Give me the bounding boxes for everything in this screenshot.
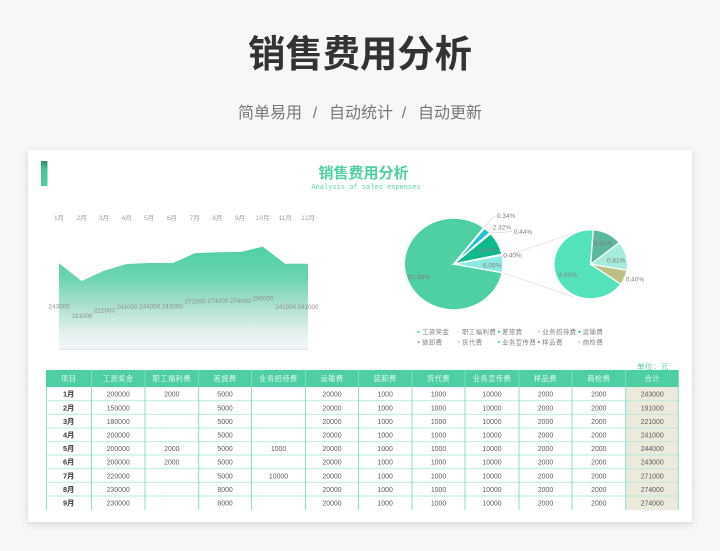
percentage labels: 4.03% (558, 272, 577, 279)
main pie (404, 218, 503, 310)
legend: 业务宣传费 (502, 337, 536, 346)
table row: 2月: 5000 (217, 405, 233, 412)
table header: 业务招待费 (259, 374, 298, 383)
area series (59, 247, 308, 349)
percentage labels: 0.34% (497, 213, 516, 220)
table row: 4月: 200000 (107, 432, 130, 440)
table row: 5月: 1000 (431, 446, 446, 453)
table total column background (626, 387, 679, 510)
subtitle: / (313, 105, 318, 122)
table row: 4月: 1000 (378, 432, 393, 440)
month axis labels: 9月 (235, 214, 245, 222)
table row: 2月: 10000 (482, 405, 502, 412)
data value labels: 271000 (184, 298, 206, 305)
table row: 7月: 1000 (431, 473, 446, 480)
legend: 职工福利费 (462, 327, 496, 336)
percentage labels: 0.40% (503, 252, 522, 260)
table row: 1月: 2000 (164, 392, 180, 399)
table row: 5月: 5000 (217, 446, 233, 453)
table row: 6月: 2000 (591, 460, 607, 467)
table row: 9月: 20000 (322, 500, 342, 508)
table row: 5月: 2000 (164, 446, 180, 453)
month axis labels: 3月 (99, 214, 109, 222)
table header: 工资奖金 (103, 374, 134, 383)
data value labels: 241000 (275, 304, 297, 311)
table row: 7月 (63, 471, 664, 480)
data value labels: 274000 (230, 298, 251, 305)
panel: spreadsheet card (28, 150, 692, 522)
table row: 4月 (63, 430, 664, 440)
table row: 6月: 200000 (107, 460, 130, 467)
table row: 1月: 1000 (431, 392, 446, 399)
table row: 1月: 1月 (63, 390, 74, 399)
table row: 5月: 5月 (63, 444, 74, 453)
card subheading: Analysis of sales expenses (311, 184, 421, 192)
table row: 6月: 1000 (378, 460, 393, 467)
legend: 货代费 (462, 337, 483, 346)
table row: 5月: 10000 (482, 446, 502, 453)
table row: 6月: 1000 (431, 460, 446, 467)
table row: 5月 (63, 444, 664, 453)
month axis labels: 7月 (190, 214, 200, 222)
percentage labels: 0.40% (626, 276, 644, 284)
table row: 6月: 2000 (538, 460, 553, 467)
table header: 商检费 (587, 374, 610, 383)
table row: 9月: 1000 (431, 500, 446, 508)
table row: 6月: 5000 (217, 460, 233, 467)
table row: 2月: 2月 (63, 403, 74, 412)
table row: 9月: 10000 (482, 500, 502, 508)
table row: 1月: 2000 (591, 392, 607, 399)
table row: 4月: 20000 (322, 432, 342, 440)
table row: 1月: 20000 (322, 392, 342, 399)
table header: 职工福利费 (153, 374, 191, 383)
table row: 8月 (63, 485, 664, 494)
legend (417, 327, 603, 346)
subtitle: 自动更新 (418, 104, 482, 122)
table row: 9月: 2000 (538, 500, 553, 508)
table row: 2月: 20000 (322, 405, 342, 412)
month axis labels: 8月 (212, 214, 222, 222)
table row: 4月: 5000 (217, 432, 233, 440)
table header: 合计 (645, 374, 660, 383)
table row: 7月: 220000 (107, 473, 130, 480)
data value labels: 221000 (94, 307, 116, 314)
legend: 业务招待费 (542, 327, 577, 336)
table row: 7月: 1000 (378, 473, 393, 480)
month axis labels: 4月 (122, 214, 132, 222)
subtitle: 自动统计 (329, 104, 393, 122)
table row: 6月: 2000 (164, 460, 180, 467)
table row: 9月: 2000 (591, 500, 607, 508)
table header (46, 370, 679, 387)
table row: 7月: 2000 (538, 473, 553, 480)
month axis labels: 2月 (77, 214, 87, 222)
table row: 4月: 241000 (641, 432, 664, 440)
main title: 销售费用分析 (248, 33, 472, 75)
table row: 9月: 8000 (217, 500, 233, 508)
table row: 9月: 274000 (641, 500, 664, 508)
table row: 4月: 2000 (591, 432, 607, 440)
data value labels: 191000 (71, 313, 93, 320)
table row: 6月 (63, 458, 664, 467)
month axis labels: 1月 (54, 214, 64, 222)
table row: 4月: 2000 (538, 432, 553, 440)
data value labels: 241000 (297, 304, 319, 311)
data table (46, 370, 679, 510)
legend: 差旅费 (502, 327, 523, 336)
table row: 9月: 1000 (378, 500, 393, 508)
table row: 1月: 10000 (482, 392, 502, 399)
table row: 3月: 2000 (538, 419, 553, 426)
subtitle: 简单易用 (238, 104, 302, 122)
data value labels: 274000 (207, 298, 229, 305)
legend: 装卸费 (422, 337, 443, 346)
table row: 3月: 1000 (378, 419, 393, 426)
percentage labels: 0.44% (514, 229, 532, 236)
table row: 3月 (63, 417, 664, 426)
table row: 5月: 244000 (641, 446, 664, 453)
percentage labels: 2.32% (493, 224, 511, 232)
unit label: 单位：元 (637, 361, 669, 371)
month axis labels: 6月 (167, 214, 177, 222)
table header: 货代费 (427, 374, 450, 383)
table row: 5月: 2000 (538, 446, 553, 453)
table row: 1月 (63, 390, 664, 399)
subtitle (238, 104, 482, 122)
month axis labels: 11月 (279, 214, 292, 222)
table row: 8月: 2000 (538, 487, 553, 494)
percentage labels: 6.05% (483, 262, 502, 270)
table row: 2月: 2000 (538, 405, 553, 412)
table row: 7月: 7月 (63, 471, 74, 480)
percentage labels: 0.81% (607, 258, 626, 264)
table row: 1月: 243000 (641, 392, 664, 399)
table row: 8月: 8月 (63, 485, 74, 494)
table header: 业务宣传费 (473, 374, 511, 383)
table row: 5月: 1000 (271, 446, 286, 453)
table row: 4月: 1000 (431, 432, 446, 440)
small slice leader lines (483, 216, 512, 255)
data value labels: 241000 (116, 304, 138, 311)
table row: 3月: 1000 (431, 419, 446, 426)
icon: accent bar (41, 161, 48, 186)
subtitle: / (402, 105, 407, 122)
data value labels (48, 295, 319, 320)
legend: 运输费 (583, 327, 603, 336)
table row: 8月: 20000 (322, 487, 342, 494)
table row: 7月: 5000 (217, 473, 233, 480)
chart: pie of pie (404, 213, 644, 310)
data value labels: 243000 (48, 304, 70, 310)
month axis labels: 5月 (144, 214, 154, 222)
table row: 7月: 10000 (269, 473, 288, 480)
table header: 装卸费 (374, 374, 397, 383)
legend: 工资奖金 (422, 327, 450, 336)
table row: 3月: 2000 (591, 419, 607, 426)
table row: 7月: 2000 (591, 473, 607, 480)
table row: 4月: 10000 (482, 432, 502, 440)
month axis labels (54, 214, 315, 222)
table row: 8月: 2000 (591, 487, 607, 494)
table row: 7月: 271000 (641, 473, 664, 480)
percentage labels: 8.07% (479, 248, 498, 254)
table row: 5月: 20000 (322, 446, 342, 453)
data value labels: 244000 (139, 303, 161, 310)
month axis labels: 10月 (256, 214, 270, 222)
percentage labels: 82.38% (408, 274, 430, 281)
table row: 6月: 243000 (641, 460, 664, 467)
table row: 3月: 20000 (322, 419, 342, 426)
table row: 1月: 1000 (378, 392, 393, 399)
legend: 商检费 (583, 337, 603, 346)
table row: 8月: 10000 (482, 487, 502, 494)
table row: 3月: 10000 (482, 419, 502, 426)
data value labels: 243000 (162, 304, 183, 310)
table row: 9月: 230000 (107, 500, 130, 508)
table header: 项目 (61, 374, 76, 383)
table header: 运输费 (320, 374, 344, 383)
table row: 2月: 150000 (107, 405, 130, 412)
table row: 9月 (63, 498, 664, 508)
table row: 2月 (63, 403, 664, 412)
table row: 1月: 200000 (107, 392, 130, 399)
table row: 2月: 2000 (591, 405, 607, 412)
area chart (48, 214, 319, 349)
table header: 样品费 (534, 374, 557, 383)
connector lines (503, 233, 573, 297)
table row: 5月: 2000 (591, 446, 607, 453)
table row: 9月: 9月 (63, 498, 74, 508)
table row: 8月: 1000 (431, 487, 446, 494)
table row: 8月: 1000 (378, 487, 393, 494)
percentage labels: 0.81% (594, 240, 613, 248)
table row: 7月: 10000 (482, 473, 502, 480)
table row: 5月: 1000 (378, 446, 393, 453)
table row: 5月: 200000 (107, 446, 130, 453)
table row: 2月: 1000 (431, 405, 446, 412)
table row: 8月: 230000 (107, 487, 130, 494)
table row: 6月: 10000 (482, 460, 502, 467)
table row: 2月: 1000 (378, 405, 393, 412)
table row: 1月: 2000 (538, 392, 553, 399)
card heading: 销售费用分析 (318, 164, 409, 182)
table row: 8月: 8000 (217, 487, 233, 494)
table row: 8月: 274000 (641, 487, 664, 494)
percentage labels (408, 213, 644, 284)
table row: 3月: 221000 (641, 419, 664, 426)
table row: 2月: 191000 (641, 405, 664, 412)
table row: 3月: 3月 (63, 417, 74, 426)
table header: 差旅费 (214, 374, 237, 383)
table row: 3月: 5000 (217, 419, 233, 426)
table row: 1月: 5000 (217, 392, 233, 399)
data value labels: 290000 (252, 295, 274, 302)
table row: 6月: 20000 (322, 460, 342, 467)
table row: 4月: 4月 (63, 430, 74, 440)
month axis labels: 12月 (301, 214, 315, 222)
table row: 7月: 20000 (322, 473, 342, 480)
legend: 样品费 (542, 337, 563, 346)
secondary pie (554, 230, 627, 299)
table row: 3月: 180000 (107, 419, 130, 426)
table row: 6月: 6月 (63, 458, 74, 467)
